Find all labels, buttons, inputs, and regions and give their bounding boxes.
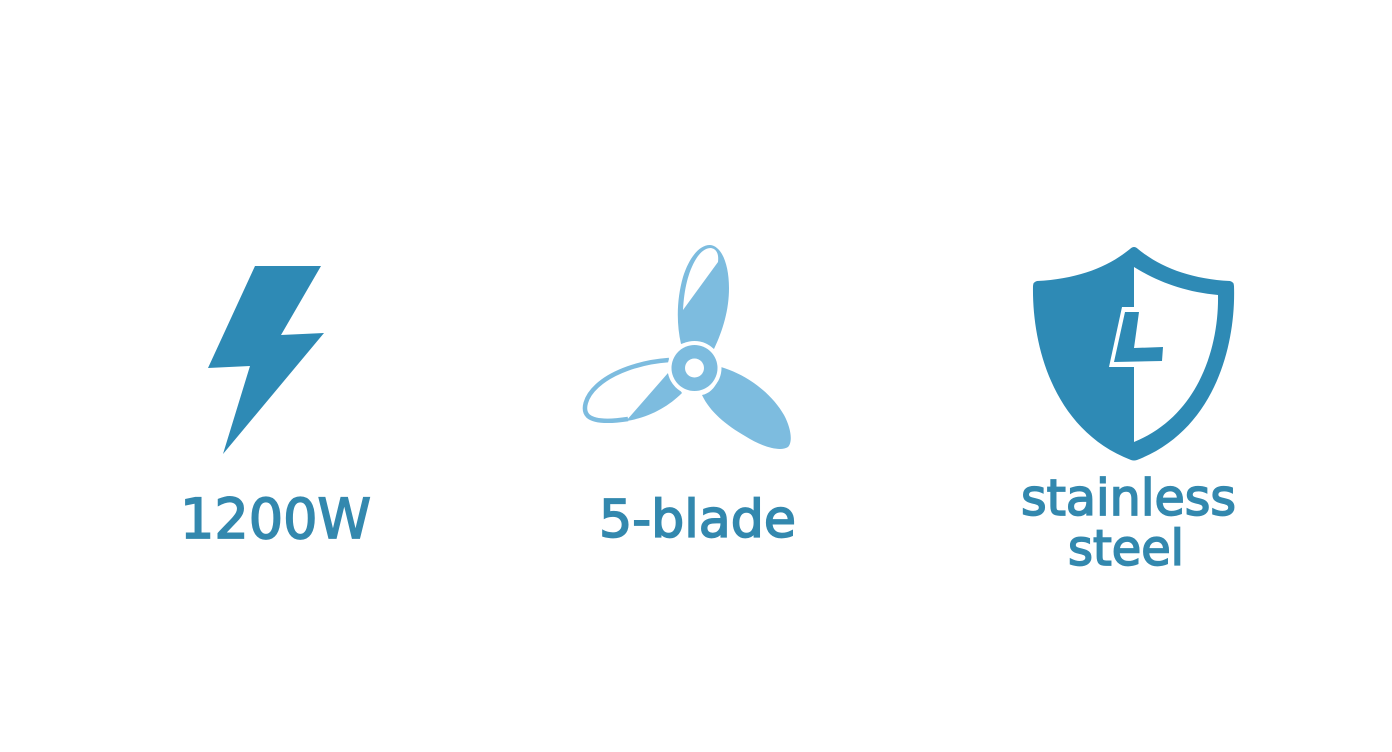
panel: blades [585,245,796,550]
icon: lightning bolt [208,266,324,454]
left blade [585,360,682,421]
top blade [678,245,729,349]
icon: fan [585,245,791,449]
label: stainless steel: steel [1068,520,1184,577]
label: 5-blade: 5-blade [599,490,796,550]
panel: material [1021,247,1236,577]
right blade [702,367,791,449]
hub [668,341,722,395]
label: stainless steel: stainless [1021,469,1236,527]
label: 1200W: 1200W [180,487,371,551]
panel: power [180,266,371,551]
label: stainless steel [1021,469,1236,577]
shield letter L [1109,307,1163,367]
icon: shield [1033,247,1234,460]
